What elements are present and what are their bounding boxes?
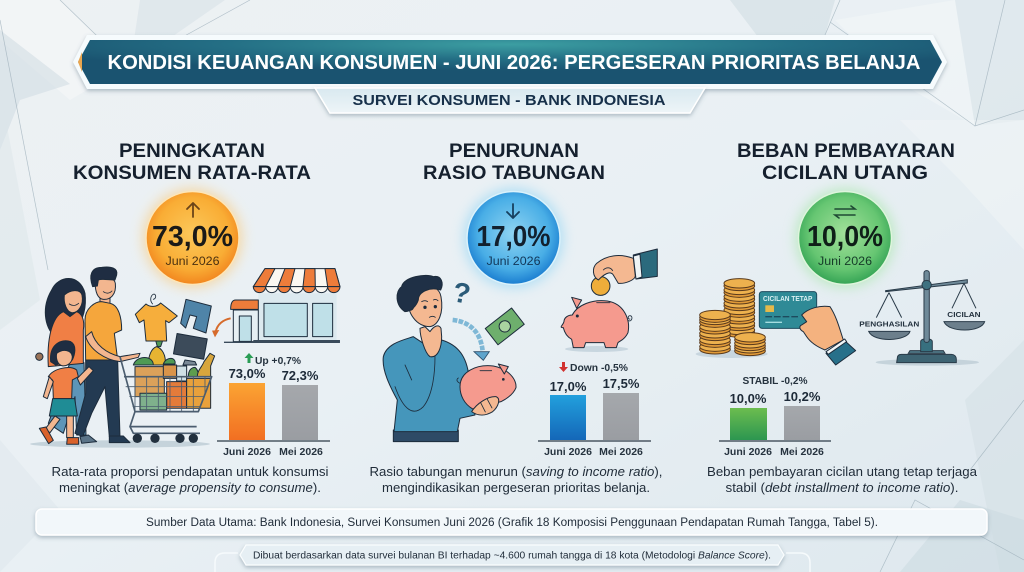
heading: cicilan: CICILAN UTANG [762,163,928,184]
methodology note: Dibuat berdasarkan data survei bulanan BI terhadap ~4.600 rumah tangga di 18 kota (Metodologi Balance Score). [253,550,771,562]
icon: balance scale [859,271,985,366]
icon: coin stacks [696,279,768,358]
bar chart: cicilan: 10,2% [784,389,821,404]
bar chart: konsumsi: 72,3% [282,368,319,383]
heading: konsumsi: KONSUMEN RATA-RATA [73,163,311,184]
icon: balance scale: CICILAN [947,310,981,319]
bar chart: cicilan [719,375,831,458]
bar chart: tabungan: Mei 2026 [599,446,643,458]
change label: down: Down -0,5% [570,362,629,374]
icon: hand holding card [800,306,856,365]
heading: tabungan [423,141,605,184]
subtitle ribbon [315,88,705,113]
bar chart: konsumsi: Juni 2026 [223,446,271,458]
icon: worried man [383,275,475,442]
title banner [73,35,947,89]
icon: small piggy bank [457,364,516,409]
metric badge: 17,0% [464,188,564,288]
heading: tabungan: RASIO TABUNGAN [423,163,605,184]
arrow: money to piggy [453,320,483,352]
bar chart: konsumsi [217,353,330,458]
illustration: worried man with piggy bank [383,249,657,442]
icon: mother [45,279,86,435]
heading: tabungan: PENURUNAN [449,141,579,162]
icon: shopping cart [120,333,215,443]
bar chart: cicilan: Mei 2026 [780,446,824,458]
metric badge: 10,0% [795,188,895,288]
icon: child [36,341,93,444]
bar chart: konsumsi: Mei 2026 [279,446,323,458]
subtitle text: SURVEI KONSUMEN - BANK INDONESIA [352,92,666,109]
bar chart: cicilan: 10,0% [730,391,767,406]
description: tabungan [370,464,662,495]
heading: konsumsi [73,141,311,184]
description: konsumsi [52,464,328,495]
bar chart: tabungan: 17,0% [550,379,587,394]
icon: credit card [759,292,817,328]
description: cicilan: Beban pembayaran cicilan utang tetap terjaga [707,464,978,479]
icon: monitor [173,334,207,365]
icon: shop building [212,269,340,342]
description: cicilan: stabil (debt installment to income ratio ). [726,480,958,495]
title text: KONDISI KEUANGAN KONSUMEN - JUNI 2026: PERGESERAN PRIORITAS BELANJA [108,52,920,74]
description: cicilan [707,464,978,495]
methodology note [215,545,810,572]
icon: large piggy bank [561,297,632,352]
illustration: family with shopping cart [30,267,340,448]
metric badge: 73,0% [142,188,242,288]
icon: holding hand [472,397,499,415]
source bar: Sumber Data Utama: Bank Indonesia, Survei Konsumen Juni 2026 (Grafik 18 Komposisi Penggunaan Pendapatan Rumah Tangga, Tabel 5). [146,517,878,529]
icon: banknote [485,308,524,345]
metric badge: 73,0%: 73,0% [152,221,233,253]
icon: credit card: CICILAN TETAP [763,296,813,303]
icon: hand with coin [591,249,657,295]
icon: balance scale: PENGHASILAN [859,320,920,329]
change label: stabil: STABIL -0,2% [742,375,808,387]
source bar [36,509,987,535]
description: tabungan: Rasio tabungan menurun ( saving to income ratio ), [370,464,662,479]
change label: up: Up +0,7% [255,355,302,367]
heading: cicilan [737,141,955,184]
icon: t-shirt [135,294,177,341]
metric badge: 17,0%: 17,0% [476,221,551,253]
panel: konsumsi [30,141,340,495]
bar chart: konsumsi: 73,0% [229,366,266,381]
heading: cicilan: BEBAN PEMBAYARAN [737,141,955,162]
icon: shorts [181,299,211,333]
metric badge: 73,0%: Juni 2026 [166,256,220,268]
description: konsumsi: Rata-rata proporsi pendapatan untuk konsumsi [52,464,328,479]
icon: question mark: ? [450,276,473,311]
metric badge: 17,0%: Juni 2026 [486,256,540,268]
metric badge: 10,0%: 10,0% [807,221,883,253]
bar chart: tabungan [538,362,651,458]
metric badge: 10,0%: Juni 2026 [818,256,872,268]
heading: konsumsi: PENINGKATAN [119,141,265,162]
icon: father [75,267,140,443]
bar chart: tabungan: 17,5% [603,376,640,391]
panel: cicilan [696,141,985,495]
panel: tabungan [370,141,662,495]
bar chart: cicilan: Juni 2026 [724,446,772,458]
description: tabungan: mengindikasikan pergeseran prioritas belanja. [382,480,650,495]
description: konsumsi: meningkat (average propensity to consume ). [59,480,321,495]
bar chart: tabungan: Juni 2026 [544,446,592,458]
illustration: coins, card and scale [696,271,985,366]
